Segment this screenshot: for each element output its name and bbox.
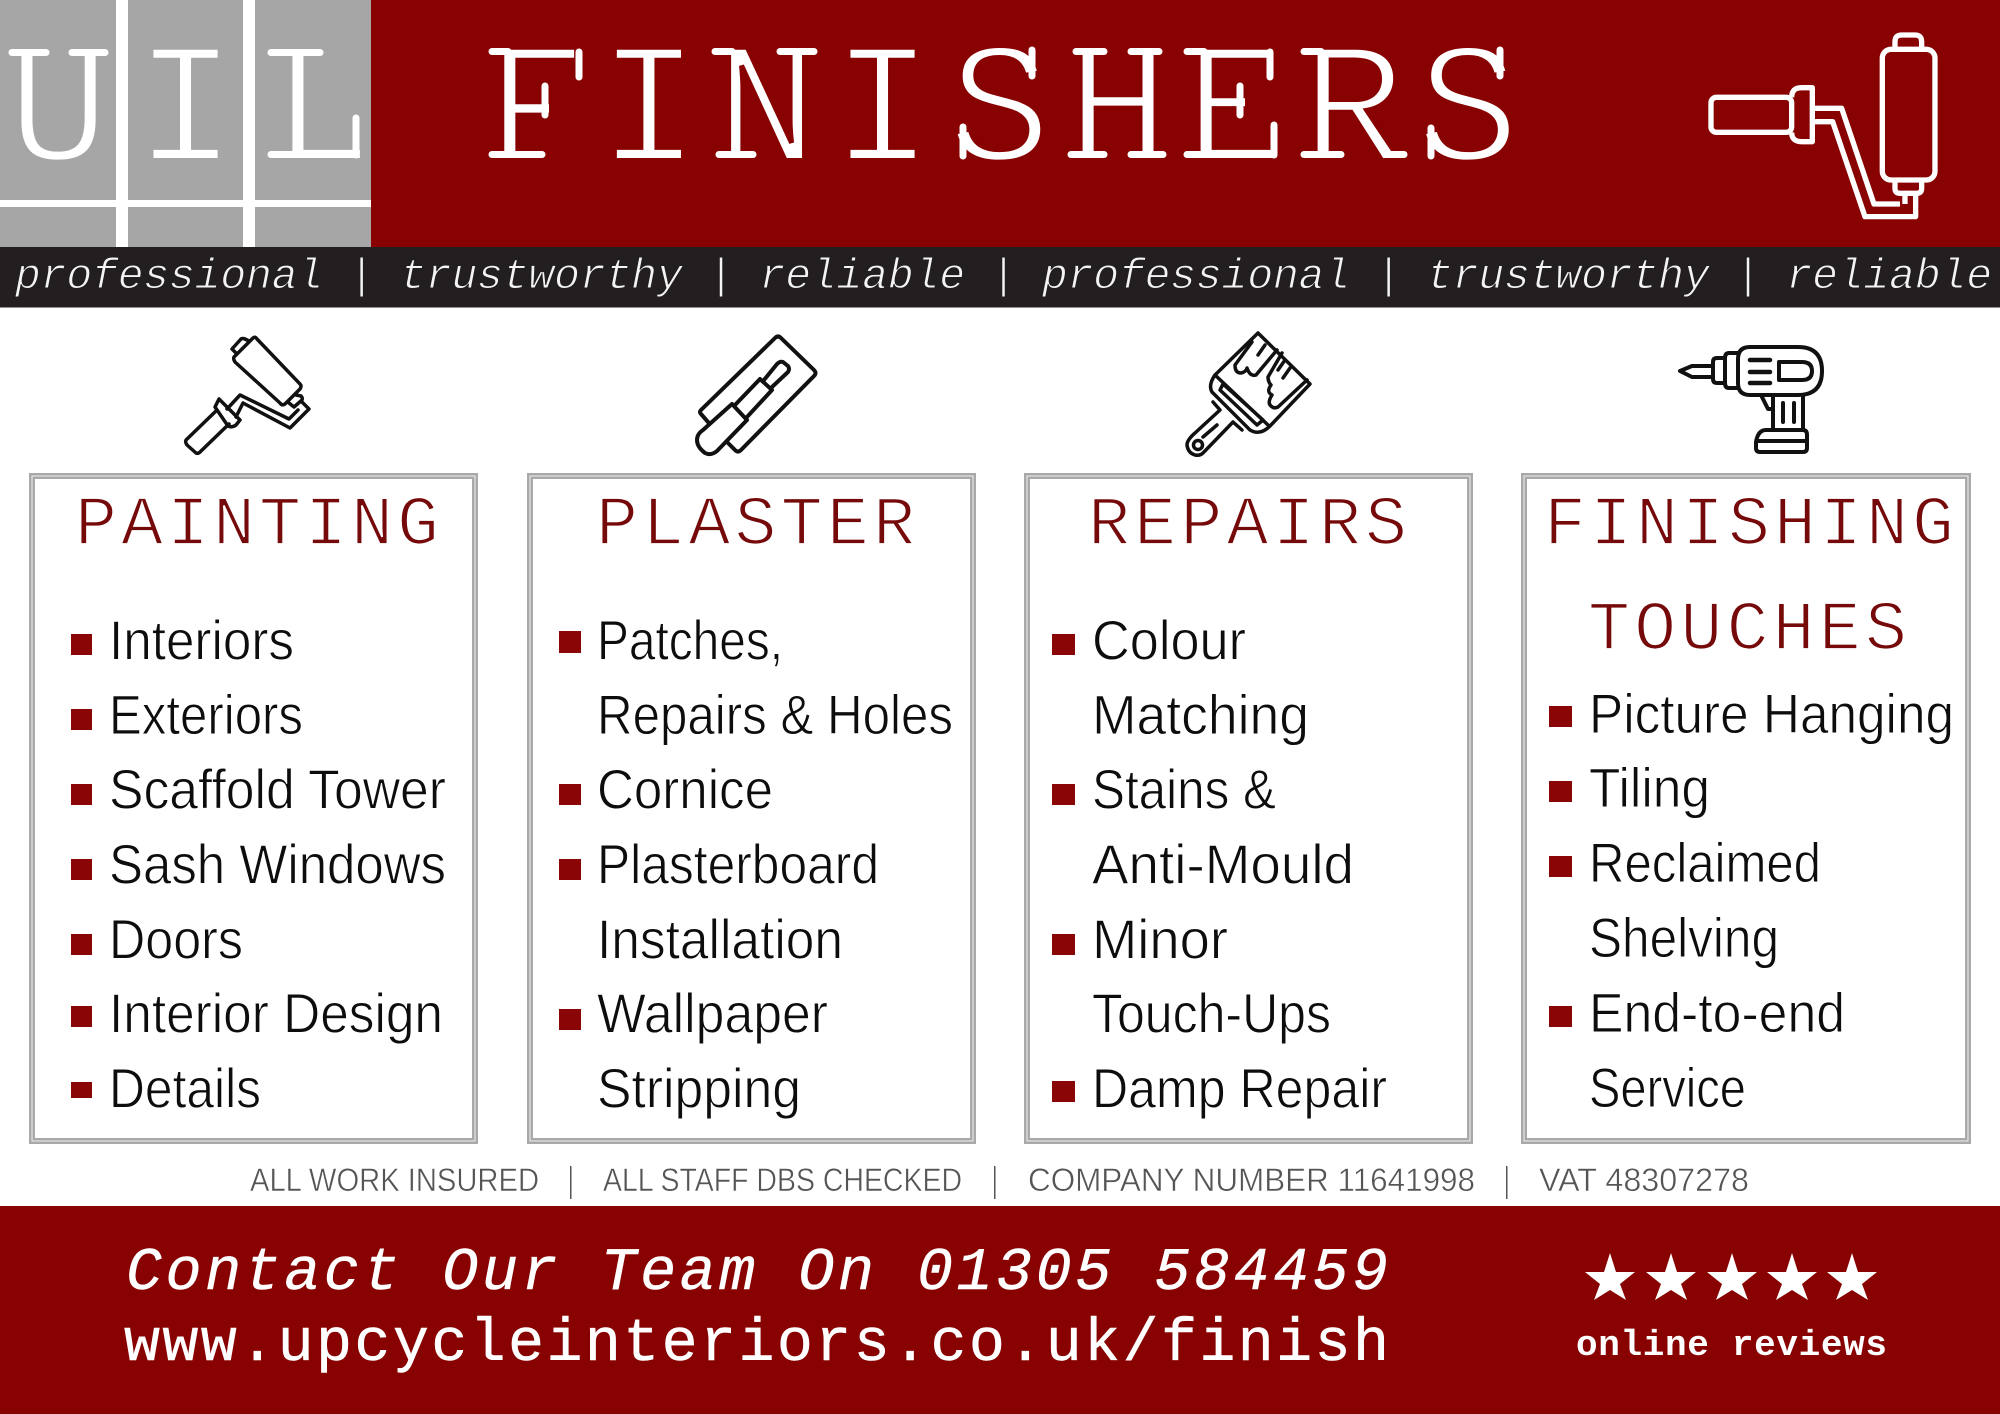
logo: UIL: UIL	[7, 18, 373, 212]
heading: repairs: REPAIRS	[1088, 487, 1407, 566]
list: painting services: Exteriors	[109, 683, 303, 746]
heading: finishing touches: FINISHING	[1544, 487, 1954, 566]
icon: cordless drill	[1680, 347, 1822, 452]
star rating	[1585, 1253, 1877, 1300]
panel: plaster	[530, 476, 973, 1141]
header banner	[0, 0, 2000, 247]
list: finishing services	[1549, 682, 1954, 1119]
panel: repairs	[1027, 476, 1470, 1141]
list: finishing services: Tiling	[1589, 756, 1710, 819]
icon: paint roller	[1711, 35, 1935, 217]
list: plaster services: Wallpaper	[597, 982, 828, 1044]
list: plaster services: Plasterboard	[597, 832, 879, 896]
list: repairs services: Touch-Ups	[1092, 982, 1331, 1044]
panel: painting	[32, 476, 475, 1141]
heading: finishing touches	[1544, 487, 1954, 671]
list: painting services: Doors	[109, 908, 243, 970]
list: finishing services: Service	[1589, 1056, 1746, 1119]
list: finishing services: End-to-end	[1589, 981, 1845, 1044]
icon: plastering trowel	[697, 336, 816, 454]
credentials strip: COMPANY NUMBER 11641998	[1028, 1162, 1475, 1198]
list: painting services	[71, 608, 446, 1120]
credentials strip: VAT 48307278	[1539, 1162, 1749, 1198]
panel: finishing touches	[1524, 476, 1968, 1141]
list: finishing services: Reclaimed	[1589, 831, 1821, 894]
online reviews label: online reviews	[1576, 1325, 1887, 1366]
list: finishing services: Picture Hanging	[1589, 682, 1954, 745]
icon: paint brush	[1187, 333, 1310, 455]
list: repairs services: Anti-Mould	[1092, 832, 1354, 896]
list: painting services: Sash Windows	[109, 832, 446, 896]
credentials strip: ALL WORK INSURED	[250, 1162, 539, 1198]
website: www.upcycleinteriors.co.uk/finish	[124, 1311, 1389, 1379]
list: repairs services: Stains &	[1092, 758, 1276, 820]
list: plaster services: Cornice	[597, 758, 773, 820]
list: plaster services: Stripping	[597, 1056, 801, 1120]
list: repairs services	[1052, 608, 1387, 1120]
heading: painting: PAINTING	[75, 487, 439, 566]
title: FINISHERS	[486, 18, 1520, 212]
list: plaster services	[559, 608, 953, 1120]
list: repairs services: Matching	[1092, 683, 1309, 746]
icon: small paint roller	[186, 337, 309, 453]
credentials strip	[250, 1162, 1749, 1199]
list: painting services: Interiors	[109, 608, 294, 672]
list: painting services: Interior Design	[109, 982, 443, 1044]
list: finishing services: Shelving	[1589, 906, 1779, 969]
list: plaster services: Patches,	[597, 608, 783, 672]
list: plaster services: Repairs & Holes	[597, 683, 953, 746]
list: repairs services: Damp Repair	[1092, 1056, 1387, 1120]
list: repairs services: Minor	[1092, 908, 1228, 970]
credentials strip: ALL STAFF DBS CHECKED	[603, 1162, 962, 1198]
list: painting services: Scaffold Tower	[109, 758, 446, 820]
tagline band: professional | trustworthy | reliable | professional | trustworthy | reliable	[14, 252, 1992, 301]
list: plaster services: Installation	[597, 908, 843, 970]
heading: plaster: PLASTER	[596, 487, 915, 566]
contact footer	[0, 1206, 2000, 1414]
list: painting services: Details	[109, 1056, 261, 1120]
contact phone: Contact Our Team On 01305 584459	[126, 1240, 1388, 1308]
list: repairs services: Colour	[1092, 608, 1246, 672]
heading: finishing touches: TOUCHES	[1588, 592, 1907, 671]
